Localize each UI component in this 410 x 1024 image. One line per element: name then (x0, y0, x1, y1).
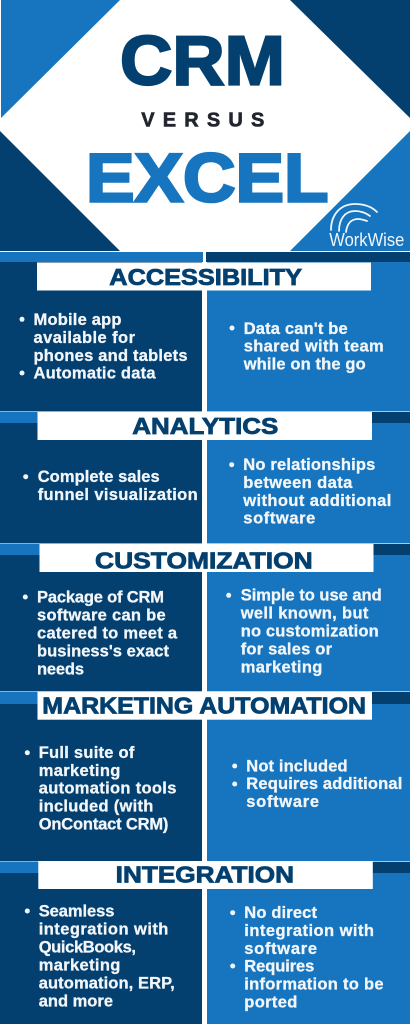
integration: CRM points: automation, ERP, (39, 975, 175, 993)
integration: Excel points: information to be (244, 976, 384, 994)
customization: Excel points: for sales or (241, 641, 333, 659)
analytics: Excel points: without additional (242, 492, 391, 510)
section: marketing automation heading: MARKETING AUTOMATION (42, 692, 366, 718)
integration: CRM points: marketing (39, 957, 120, 975)
marketing automation: CRM points: included (with (39, 798, 153, 816)
section: accessibility heading (37, 262, 371, 290)
accessibility: CRM points: Mobile app (34, 311, 122, 329)
customization: CRM points (23, 589, 178, 678)
section: integration heading: INTEGRATION (116, 861, 294, 887)
analytics: Excel points: software (243, 510, 315, 528)
integration: Excel points: No direct (244, 904, 318, 922)
customization: Excel points: well known, but (240, 605, 369, 623)
accessibility: Excel points: shared with team (244, 338, 384, 356)
accessibility: CRM points: phones and tablets (34, 347, 188, 365)
accessibility: CRM points (20, 311, 188, 382)
integration: Excel points (230, 904, 384, 1012)
section: analytics heading (0, 411, 410, 440)
section: marketing automation heading (0, 691, 410, 720)
customization: Excel points: marketing (241, 659, 322, 677)
integration: Excel points: Requires (244, 958, 314, 976)
integration: Excel points: ported (244, 994, 297, 1012)
panel: Excel column (207, 262, 410, 1024)
customization: CRM points: needs (37, 660, 84, 678)
analytics: CRM points: Complete sales (38, 468, 160, 486)
accessibility: CRM points: available for (34, 329, 136, 347)
marketing automation: CRM points: OnContact CRM) (39, 816, 168, 834)
title: CRM: CRM (120, 22, 285, 100)
accessibility: Excel points: Data can't be (244, 320, 348, 338)
integration: CRM points: Seamless (39, 903, 114, 921)
accessibility: Excel points: while on the go (243, 356, 366, 374)
integration: CRM points (25, 903, 175, 1010)
marketing automation: CRM points (25, 744, 176, 834)
analytics: Excel points: No relationships (243, 456, 375, 474)
marketing automation: CRM points: automation tools (39, 780, 176, 798)
section: customization heading: CUSTOMIZATION (95, 547, 313, 573)
accessibility: CRM points: Automatic data (34, 364, 156, 382)
customization: Excel points: no customization (241, 623, 379, 641)
logo: WorkWise (329, 204, 404, 250)
section: accessibility heading: ACCESSIBILITY (109, 264, 302, 290)
customization: CRM points: catered to meet a (37, 625, 178, 643)
marketing automation: CRM points: marketing (39, 762, 120, 780)
integration: CRM points: and more (39, 992, 113, 1010)
analytics: Excel points: between data (243, 474, 353, 492)
customization: Excel points (226, 587, 382, 677)
marketing automation: Excel points: Requires additional (246, 775, 402, 793)
marketing automation: Excel points (232, 757, 402, 811)
section: integration heading (0, 861, 410, 889)
integration: Excel points: software (244, 940, 317, 958)
marketing automation: Excel points: software (246, 793, 319, 811)
title: Excel: EXCEL (86, 140, 328, 216)
integration: CRM points: integration with (39, 921, 168, 939)
title: versus: VERSUS (141, 110, 264, 132)
customization: CRM points: software can be (37, 607, 166, 625)
customization: CRM points: Package of CRM (37, 589, 164, 607)
integration: CRM points: QuickBooks, (39, 939, 136, 957)
section: customization heading (0, 543, 410, 573)
analytics: Excel points (229, 456, 391, 528)
marketing automation: CRM points: Full suite of (39, 744, 135, 762)
header panel (0, 0, 410, 252)
top bar right (206, 252, 410, 262)
marketing automation: Excel points: Not included (246, 757, 348, 775)
accessibility: Excel points (230, 320, 384, 374)
analytics: CRM points: funnel visualization (38, 486, 198, 504)
top bar left (0, 252, 203, 262)
analytics: CRM points (23, 468, 198, 504)
integration: Excel points: integration with (244, 922, 374, 940)
panel: CRM column (0, 262, 202, 1024)
customization: CRM points: business's exact (37, 643, 170, 661)
section: analytics heading: ANALYTICS (132, 413, 278, 439)
customization: Excel points: Simple to use and (241, 587, 382, 605)
